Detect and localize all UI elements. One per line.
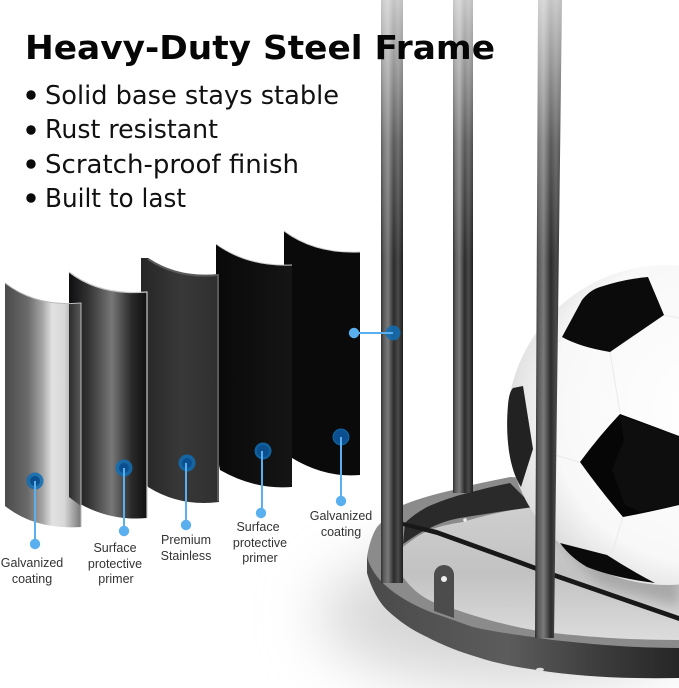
layer 5 <box>284 231 360 475</box>
layer labels: protective <box>233 536 287 550</box>
ball shadow on floor <box>540 520 679 606</box>
back wall <box>403 483 534 544</box>
pentagon left <box>507 386 533 487</box>
bullet list: Solid base stays stable <box>45 81 339 111</box>
bullet list: Rust resistant <box>45 115 218 145</box>
layer labels: Stainless <box>161 549 211 563</box>
steel base <box>367 477 679 678</box>
layer labels: primer <box>242 551 278 565</box>
layer diagram <box>5 231 360 527</box>
layer labels: Galvanized <box>1 556 63 570</box>
layer 4 <box>216 244 292 487</box>
layer labels: primer <box>98 572 134 586</box>
bullet list: Scratch-proof finish <box>45 150 299 180</box>
layer labels: Premium <box>161 533 211 547</box>
layer labels: Galvanized <box>310 509 372 523</box>
layer labels <box>1 509 372 586</box>
layer 1 <box>5 283 81 527</box>
cross brace <box>403 522 679 621</box>
mounting tab <box>434 565 454 618</box>
pentagon top <box>562 277 664 352</box>
soccer ball <box>507 265 679 585</box>
band outer wall <box>367 557 679 678</box>
floor <box>403 507 679 640</box>
bullet list: Built to last <box>45 184 186 214</box>
layer labels: coating <box>321 525 361 539</box>
layer 2 <box>69 272 147 519</box>
layer 3 <box>141 258 219 503</box>
pentagon bottom <box>560 543 655 583</box>
layer labels: Surface <box>93 541 137 555</box>
bolts <box>463 518 467 522</box>
layer labels: Surface <box>236 520 280 534</box>
callout markers <box>26 326 400 549</box>
bullet list <box>26 81 339 214</box>
steel rods <box>380 0 563 638</box>
pentagon center <box>580 414 679 517</box>
layer labels: coating <box>12 572 52 586</box>
ring top surface <box>367 477 679 648</box>
title: Heavy-Duty Steel Frame <box>25 28 495 67</box>
layer labels: protective <box>88 557 142 571</box>
